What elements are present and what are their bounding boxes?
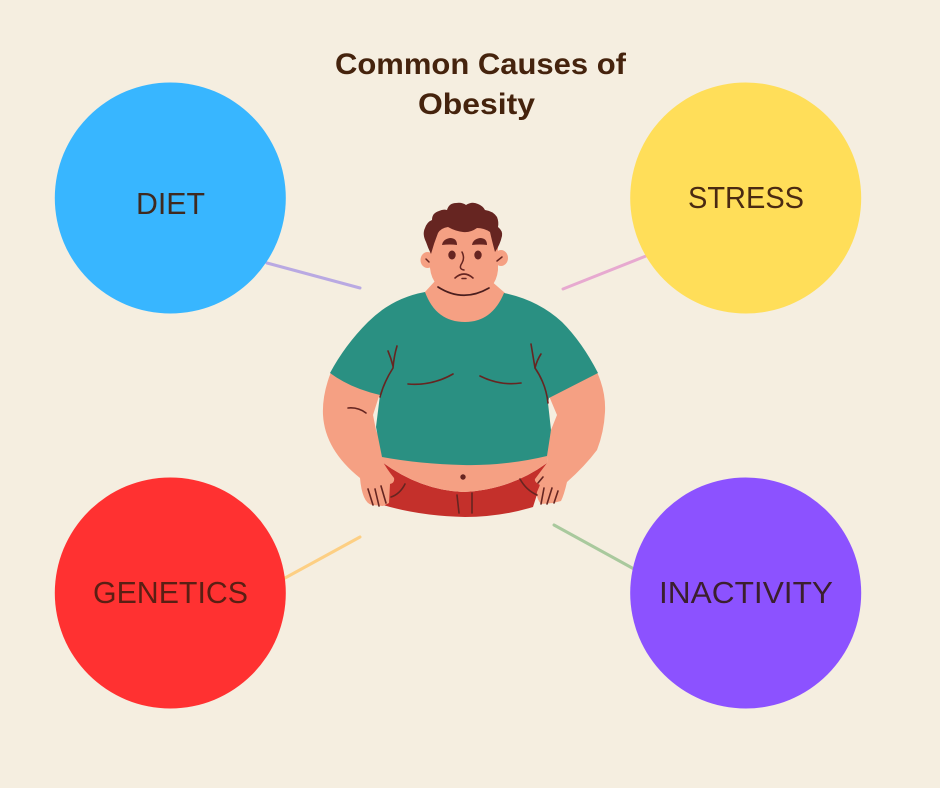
right arm and hand [535, 372, 605, 504]
title [335, 48, 627, 121]
navel [460, 474, 466, 480]
ears [420, 250, 508, 268]
connector: genetics [285, 537, 360, 578]
left arm and hand [323, 372, 394, 506]
body crease lines [348, 344, 558, 513]
belly [381, 450, 548, 492]
eyebrows [442, 238, 487, 245]
shirt [330, 292, 598, 465]
face [430, 220, 498, 297]
shorts [382, 462, 547, 517]
connector: diet [267, 263, 360, 288]
nose, mouth and facial lines [426, 252, 502, 295]
connector: stress [563, 256, 646, 289]
title: Obesity [418, 88, 535, 121]
connector: inactivity [554, 525, 634, 569]
hair [424, 203, 502, 254]
circle: genetics: GENETICS [93, 575, 248, 610]
circle: inactivity: INACTIVITY [659, 575, 833, 610]
neck [424, 280, 505, 324]
circle: diet [55, 82, 286, 314]
circle: stress [630, 82, 861, 314]
title: Common Causes of [335, 48, 627, 81]
circle: diet: DIET [136, 186, 205, 221]
circle: inactivity [630, 478, 861, 708]
eyes [448, 250, 482, 260]
circle: genetics [55, 478, 286, 708]
illustration: man [323, 203, 605, 517]
circle: stress: STRESS [688, 180, 804, 215]
